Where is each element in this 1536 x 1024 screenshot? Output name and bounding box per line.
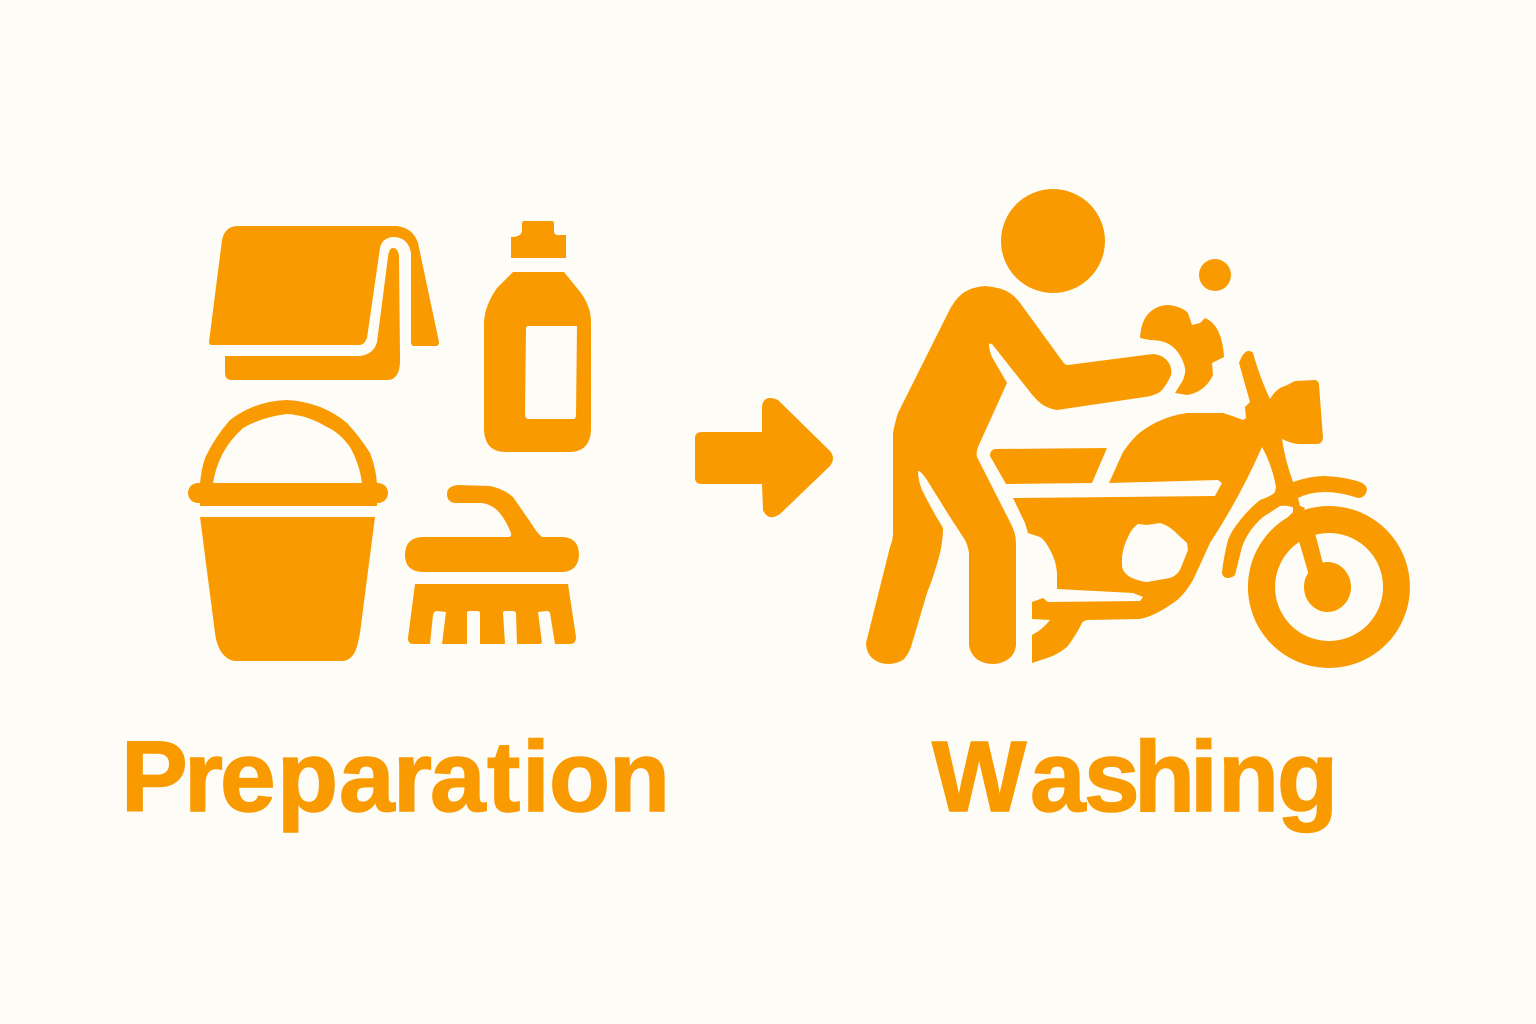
icon: person head (1001, 189, 1105, 293)
icon: motorcycle wheel (1248, 506, 1410, 668)
icon: person body (866, 286, 1171, 664)
heading: Preparation: Preparation (121, 721, 670, 833)
icon: motorcycle frame (1013, 351, 1367, 663)
icon: foam cluster (1140, 305, 1224, 395)
arrow (695, 398, 833, 517)
heading: Washing: Washing (932, 721, 1338, 833)
icon: wheel hub and fork (1299, 533, 1351, 612)
icon: towel (209, 226, 439, 380)
icon: detergent bottle (484, 221, 591, 452)
panel: preparation icons (188, 221, 591, 661)
motorcycle fork joint (1287, 505, 1305, 518)
panel: washing illustration (866, 189, 1410, 668)
icon: bucket (188, 400, 388, 661)
icon: scrub brush (405, 485, 579, 644)
icon: foam bubble (1199, 259, 1231, 291)
icon: motorcycle seat (990, 448, 1107, 484)
